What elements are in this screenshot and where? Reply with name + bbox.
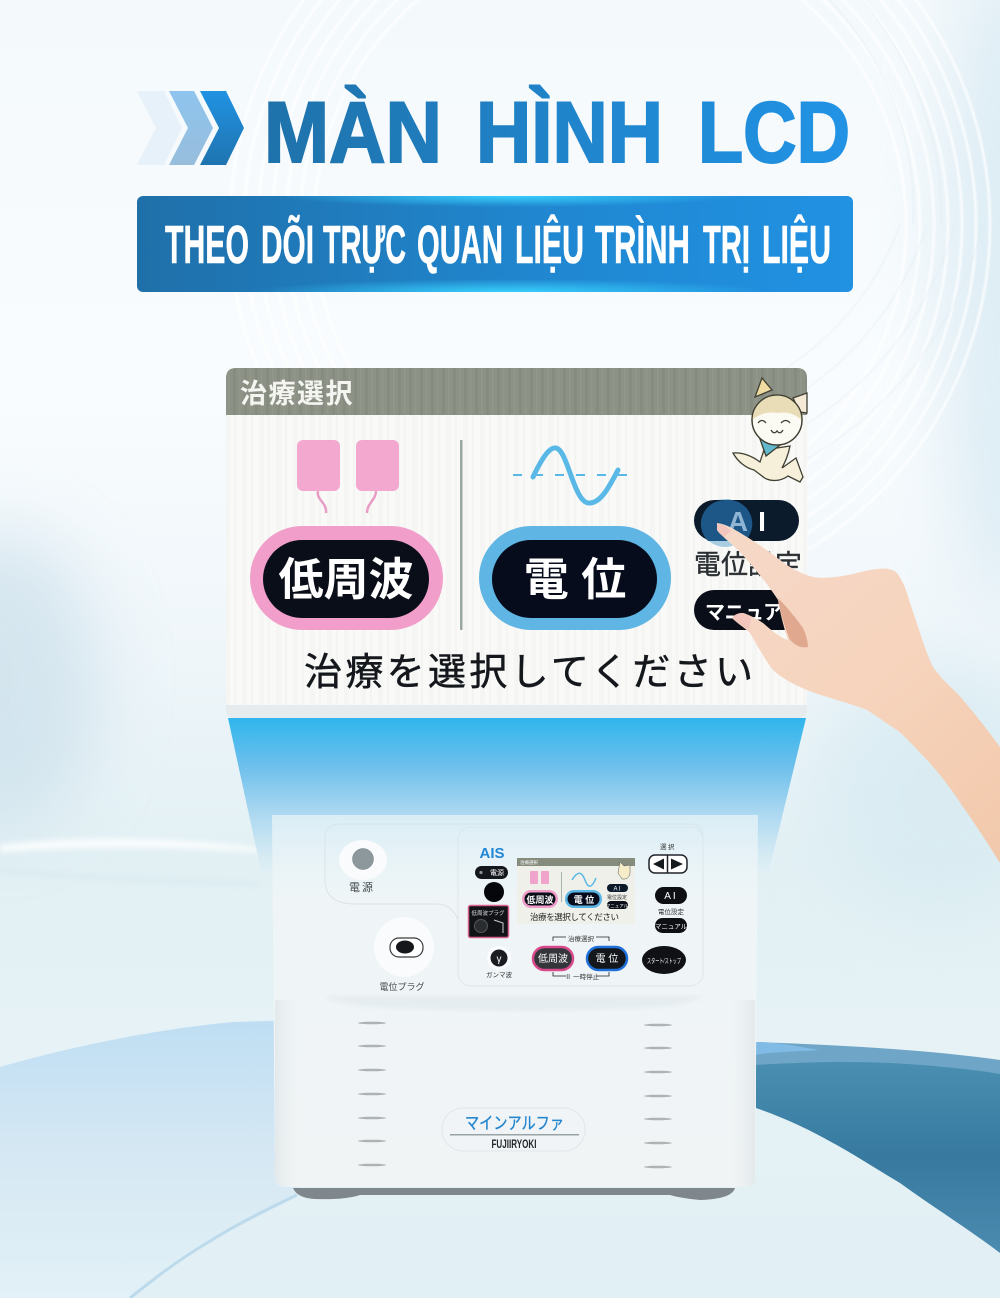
AIS label: AIS (479, 845, 505, 862)
button: low frequency: 低周波 (278, 554, 414, 605)
vents left (358, 1022, 386, 1166)
divider (460, 440, 462, 630)
panel button: low frequency: 低周波 (538, 952, 568, 965)
low frequency plug box: 低周波プラグ (471, 909, 505, 917)
mini LCD (517, 858, 635, 924)
panel button: start stop (642, 946, 686, 974)
treatment selection label: Ⅱ 一時停止 (565, 972, 600, 981)
AI and manual small buttons: マニュアル (655, 922, 688, 930)
subtitle text (165, 214, 831, 275)
panel button: low frequency (533, 947, 573, 970)
subtitle text: TRỰC (323, 215, 406, 275)
decorative floor curve right (756, 1042, 1000, 1080)
title: HÌNH (476, 85, 663, 181)
logo plate (442, 1108, 585, 1151)
button: potential (479, 526, 671, 630)
button: AI: A (728, 506, 748, 537)
title: MÀN (264, 85, 442, 181)
panel button: start stop: スタート/ストップ (647, 956, 681, 965)
power section: 電源 (349, 880, 375, 894)
power indicator (475, 866, 508, 879)
subtitle text: TRỊ (703, 215, 750, 275)
AI and manual small buttons: AI (664, 891, 678, 902)
panel button: potential (587, 947, 627, 970)
button: AI (694, 499, 799, 547)
button: manual: マニュアル (705, 602, 802, 624)
power indicator: 電源 (490, 868, 504, 877)
label: potential setting: 電位設定 (694, 550, 802, 580)
neck: blue gradient stand under screen (228, 718, 806, 875)
logo plate: マインアルファ (465, 1114, 564, 1133)
gamma button: γ (496, 954, 502, 965)
device: main white body (272, 815, 758, 1200)
lower body raised area (323, 996, 703, 1011)
subtitle text: QUAN (417, 215, 503, 275)
button: AI: I (758, 506, 766, 537)
panel button: potential: 電 位 (596, 952, 618, 965)
selection arrows (649, 842, 687, 873)
AI and manual small buttons: 電位設定 (658, 907, 684, 916)
gamma button: ガンマ波 (486, 970, 512, 979)
power section (325, 824, 703, 920)
mini LCD: A I (613, 886, 621, 892)
screen header bar: 治療選択 (240, 379, 354, 409)
subtitle text: TRÌNH (595, 215, 690, 275)
fingernails (717, 523, 751, 630)
button: low frequency (250, 526, 443, 630)
vents right (644, 1024, 672, 1168)
panel: enlarged LCD screen (226, 368, 807, 718)
icon: triple chevrons (137, 91, 244, 165)
low frequency plug box (468, 906, 508, 938)
subtitle text: THEO (165, 215, 249, 275)
control panel (458, 827, 703, 986)
mini LCD: 電位設定 (607, 894, 627, 901)
device base shadow (293, 1188, 735, 1200)
gamma button (486, 946, 512, 979)
button: potential: 電 位 (524, 554, 626, 605)
mini LCD: 電 位 (574, 894, 594, 905)
potential plug socket (374, 917, 434, 992)
subtitle text: LIỆU (515, 214, 584, 275)
mini LCD: 治療を選択してください (530, 912, 619, 922)
subtitle text: LIỆU (762, 214, 831, 275)
instruction text: 治療を選択してください (304, 652, 753, 694)
mini LCD: 低周波 (526, 894, 554, 905)
screen header bar (226, 368, 807, 415)
decorative floor curve left (0, 1020, 300, 1298)
hand pointing at screen (717, 523, 1000, 863)
potential plug socket: 電位プラグ (379, 981, 425, 992)
logo plate: FUJIIRYOKI (492, 1139, 536, 1151)
icon: electrode pads (297, 440, 399, 513)
treatment selection label (553, 934, 609, 981)
treatment selection label: 治療選択 (568, 934, 594, 943)
selection arrows: 選択 (660, 842, 676, 851)
black sensor (484, 882, 504, 902)
icon: cat mascot (733, 378, 807, 482)
mini LCD: マニュアル (606, 904, 629, 910)
subtitle banner (137, 196, 853, 292)
icon: potential wave (513, 448, 637, 503)
AI and manual small buttons (655, 887, 688, 933)
title (264, 85, 850, 181)
finger gap shading (778, 598, 808, 647)
subtitle text: DÕI (261, 215, 314, 275)
button: manual (694, 590, 804, 630)
title: LCD (698, 85, 850, 181)
mini LCD: 治療選択 (520, 859, 538, 866)
